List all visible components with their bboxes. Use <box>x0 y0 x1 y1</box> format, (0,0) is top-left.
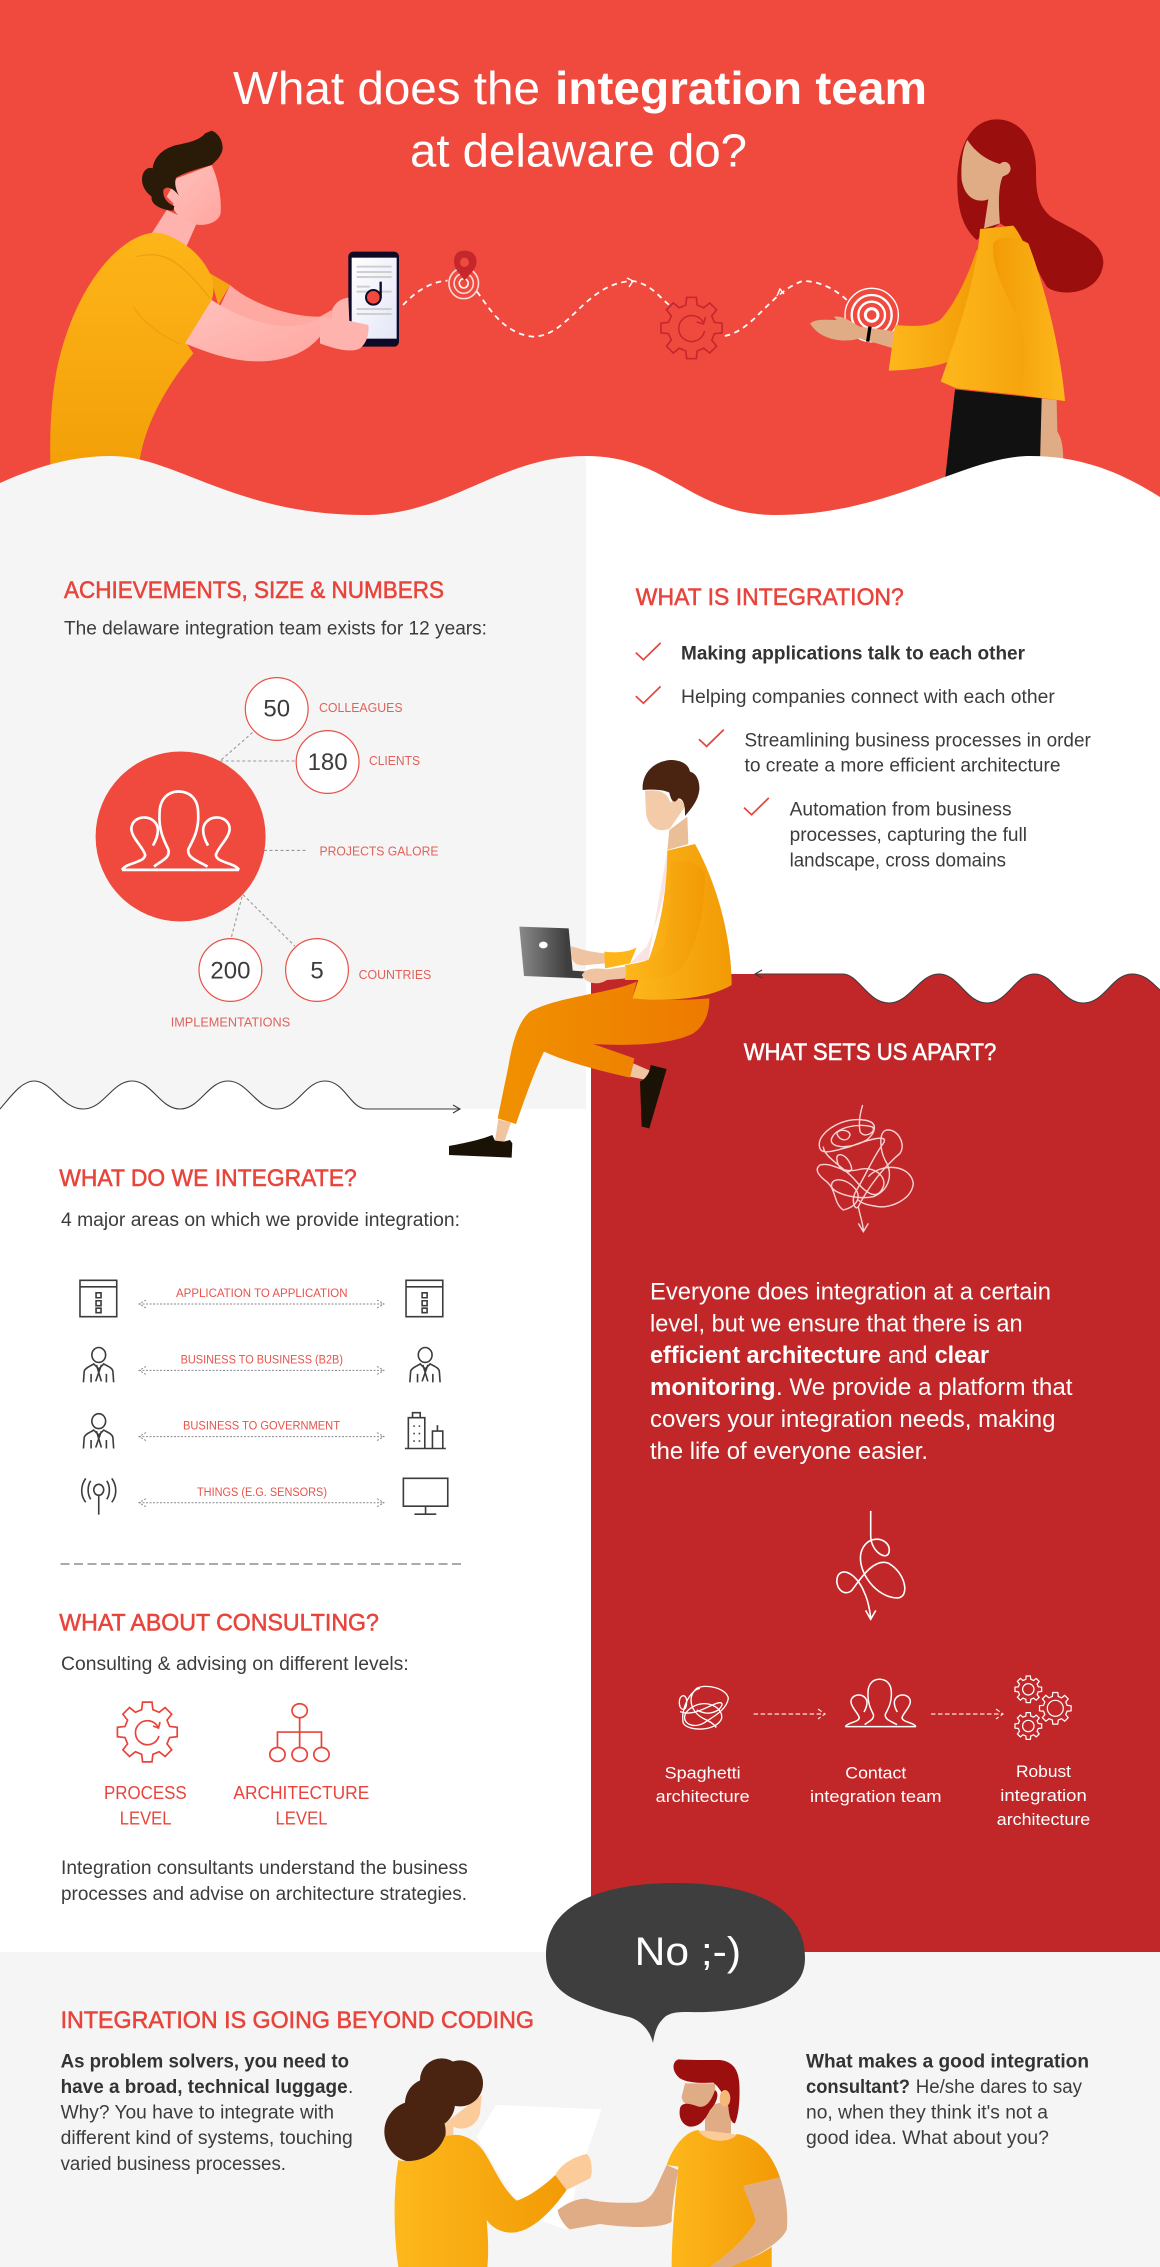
stat: 200 implementations <box>171 939 291 1029</box>
stat: 180 clients <box>296 731 420 793</box>
row: things: THINGS (E.G. SENSORS) <box>197 1487 327 1499</box>
label: architecture level: ARCHITECTURE <box>233 1783 369 1803</box>
checklist item 2: Helping companies connect with each other <box>681 687 1055 708</box>
heading: INTEGRATION IS GOING BEYOND CODING <box>61 2007 534 2034</box>
flow: spaghetti architecture: Spaghetti <box>665 1764 741 1782</box>
background: what is integration white <box>586 456 1160 980</box>
icon: architecture level hierarchy <box>270 1704 329 1761</box>
title: at delaware do? <box>410 125 747 177</box>
intro text: 4 major areas on which we provide integration: <box>61 1210 460 1231</box>
text: body paragraph: monitoring <box>650 1374 776 1401</box>
stat: 180 clients: CLIENTS <box>369 753 420 768</box>
text: body paragraph: . We provide a platform that <box>776 1374 1073 1401</box>
row: application to application <box>80 1280 443 1317</box>
illustration: man holding phone <box>50 131 399 473</box>
heading: WHAT DO WE INTEGRATE? <box>59 1165 357 1192</box>
text: good consultant: good idea. What about you? <box>806 2128 1049 2149</box>
background: beyond coding grey <box>0 1952 1160 2267</box>
speech bubble <box>546 1883 805 2043</box>
checklist item 1: Making applications talk to each other <box>681 644 1026 665</box>
stat: 50 colleagues: COLLEAGUES <box>319 700 403 715</box>
icon: target rings <box>845 288 898 342</box>
illustration: sitting man with laptop <box>449 760 732 1158</box>
text: good consultant: He/she dares to say <box>916 2077 1082 2098</box>
text: problem solvers: . <box>348 2077 353 2098</box>
stat: 5 countries <box>286 939 432 1001</box>
intro text: Consulting & advising on different levels: <box>61 1654 409 1675</box>
panel: beyond coding <box>61 2007 1089 2175</box>
text: body paragraph: covers your integration needs, making <box>650 1406 1056 1433</box>
stat: 50 colleagues: 50 <box>263 696 290 722</box>
stat: 180 clients: 180 <box>308 749 348 776</box>
stat: 200 implementations: 200 <box>210 958 250 984</box>
panel: what about consulting <box>59 1610 468 1905</box>
row: business to government: BUSINESS TO GOVERNMENT <box>183 1421 340 1433</box>
icon: location pin <box>449 251 479 299</box>
text: consultants note: processes and advise on architecture strategies. <box>61 1884 467 1905</box>
text: good consultant: consultant? <box>806 2077 910 2098</box>
label: projects galore: PROJECTS GALORE <box>320 843 439 858</box>
title: integration team <box>555 62 927 114</box>
text: body paragraph: and <box>888 1342 928 1369</box>
text: problem solvers: As problem solvers, you need to <box>61 2052 349 2073</box>
text: problem solvers: have a broad, technical luggage <box>61 2077 348 2098</box>
text: good consultant: no, when they think it's not a <box>806 2103 1048 2124</box>
label: architecture level <box>233 1783 369 1829</box>
text: body paragraph: clear <box>935 1342 989 1369</box>
icon: untangled line <box>837 1511 905 1619</box>
arrow: team to robust <box>931 1709 1003 1719</box>
text: problem solvers: different kind of systems, touching <box>61 2128 353 2149</box>
icon: tangled scribble <box>817 1105 913 1232</box>
text: body paragraph: Everyone does integration at a certain <box>650 1278 1051 1305</box>
flow: robust integration architecture: integration <box>1000 1786 1087 1805</box>
icon: phone <box>348 252 399 347</box>
heading: WHAT SETS US APART? <box>744 1039 996 1066</box>
text: consultants note <box>61 1858 468 1905</box>
icon: process gear <box>661 297 722 359</box>
arrow: spaghetti to team <box>754 1709 825 1719</box>
row: business to government <box>83 1413 446 1448</box>
stat: 5 countries: 5 <box>310 958 324 984</box>
stat: 200 implementations: IMPLEMENTATIONS <box>171 1014 291 1029</box>
text: team intro: The delaware integration team exists for 12 years: <box>64 618 487 640</box>
chart: numbers diagram <box>96 678 439 1029</box>
label: process level <box>104 1783 187 1829</box>
background: header red <box>0 0 1160 530</box>
row: things <box>82 1478 448 1515</box>
row: application to application: APPLICATION TO APPLICATION <box>176 1288 348 1300</box>
flow: robust integration architecture <box>997 1676 1090 1829</box>
text: good consultant <box>806 2052 1089 2149</box>
background: what sets us apart red <box>591 974 1160 1952</box>
checklist item 4: processes, capturing the full <box>790 825 1027 846</box>
checklist item 4 <box>744 798 1027 871</box>
text: body paragraph: level, but we ensure that there is an <box>650 1311 1023 1338</box>
row: business to business: BUSINESS TO BUSINESS (B2B) <box>181 1354 343 1366</box>
text: good consultant: What makes a good integration <box>806 2052 1089 2073</box>
title <box>233 62 927 177</box>
text: problem solvers <box>61 2052 353 2175</box>
background: what do we integrate white <box>0 1081 591 1952</box>
flow: contact integration team: integration team <box>810 1787 942 1806</box>
illustration: woman with hand out <box>810 119 1103 480</box>
text: body paragraph <box>650 1278 1073 1465</box>
heading: WHAT IS INTEGRATION? <box>636 584 904 611</box>
text: body paragraph: the life of everyone easier. <box>650 1438 928 1465</box>
divider <box>60 1563 463 1565</box>
checklist item 4: landscape, cross domains <box>790 850 1006 871</box>
stat: 50 colleagues <box>245 678 403 740</box>
flow: robust integration architecture: Robust <box>1016 1762 1071 1781</box>
label: architecture level: LEVEL <box>276 1809 328 1829</box>
big circle with people icon <box>96 752 266 922</box>
heading: WHAT ABOUT CONSULTING? <box>59 1610 379 1637</box>
row: business to business <box>83 1348 440 1382</box>
label: process level: PROCESS <box>104 1783 187 1803</box>
panel: what do we integrate <box>59 1165 460 1515</box>
panel: what sets us apart <box>650 1039 1090 1829</box>
arrow: wavy line right <box>755 970 1160 1003</box>
flow: contact integration team: Contact <box>845 1764 907 1782</box>
background: achievements grey <box>0 456 586 1109</box>
illustration: woman with paper <box>384 2058 602 2267</box>
arrow: wavy line left <box>0 1081 460 1113</box>
stat: 5 countries: COUNTRIES <box>359 967 432 982</box>
flow: spaghetti architecture: architecture <box>656 1787 750 1806</box>
heading: achievements: ACHIEVEMENTS, SIZE & NUMBERS <box>64 577 444 604</box>
label: process level: LEVEL <box>120 1809 172 1829</box>
checklist item 3: to create a more efficient architecture <box>744 756 1060 777</box>
flow: spaghetti architecture <box>656 1686 750 1806</box>
checklist item 3 <box>699 730 1091 777</box>
title: What does the <box>233 62 540 114</box>
illustration: dashed route <box>403 251 847 359</box>
icon: process level gear <box>117 1702 177 1762</box>
illustration: bearded man <box>558 2059 787 2267</box>
speech bubble: No ;-) <box>635 1930 741 1974</box>
text: body paragraph: efficient architecture <box>650 1342 881 1369</box>
flow: robust integration architecture: architecture <box>997 1810 1090 1829</box>
text: problem solvers: Why? You have to integrate with <box>61 2103 334 2124</box>
text: problem solvers: varied business processes. <box>61 2154 286 2175</box>
checklist item 3: Streamlining business processes in order <box>744 730 1091 751</box>
text: consultants note: Integration consultants understand the business <box>61 1858 468 1879</box>
checklist item 4: Automation from business <box>790 800 1012 820</box>
flow: contact integration team <box>810 1679 942 1806</box>
panel: what is integration <box>636 584 1091 871</box>
